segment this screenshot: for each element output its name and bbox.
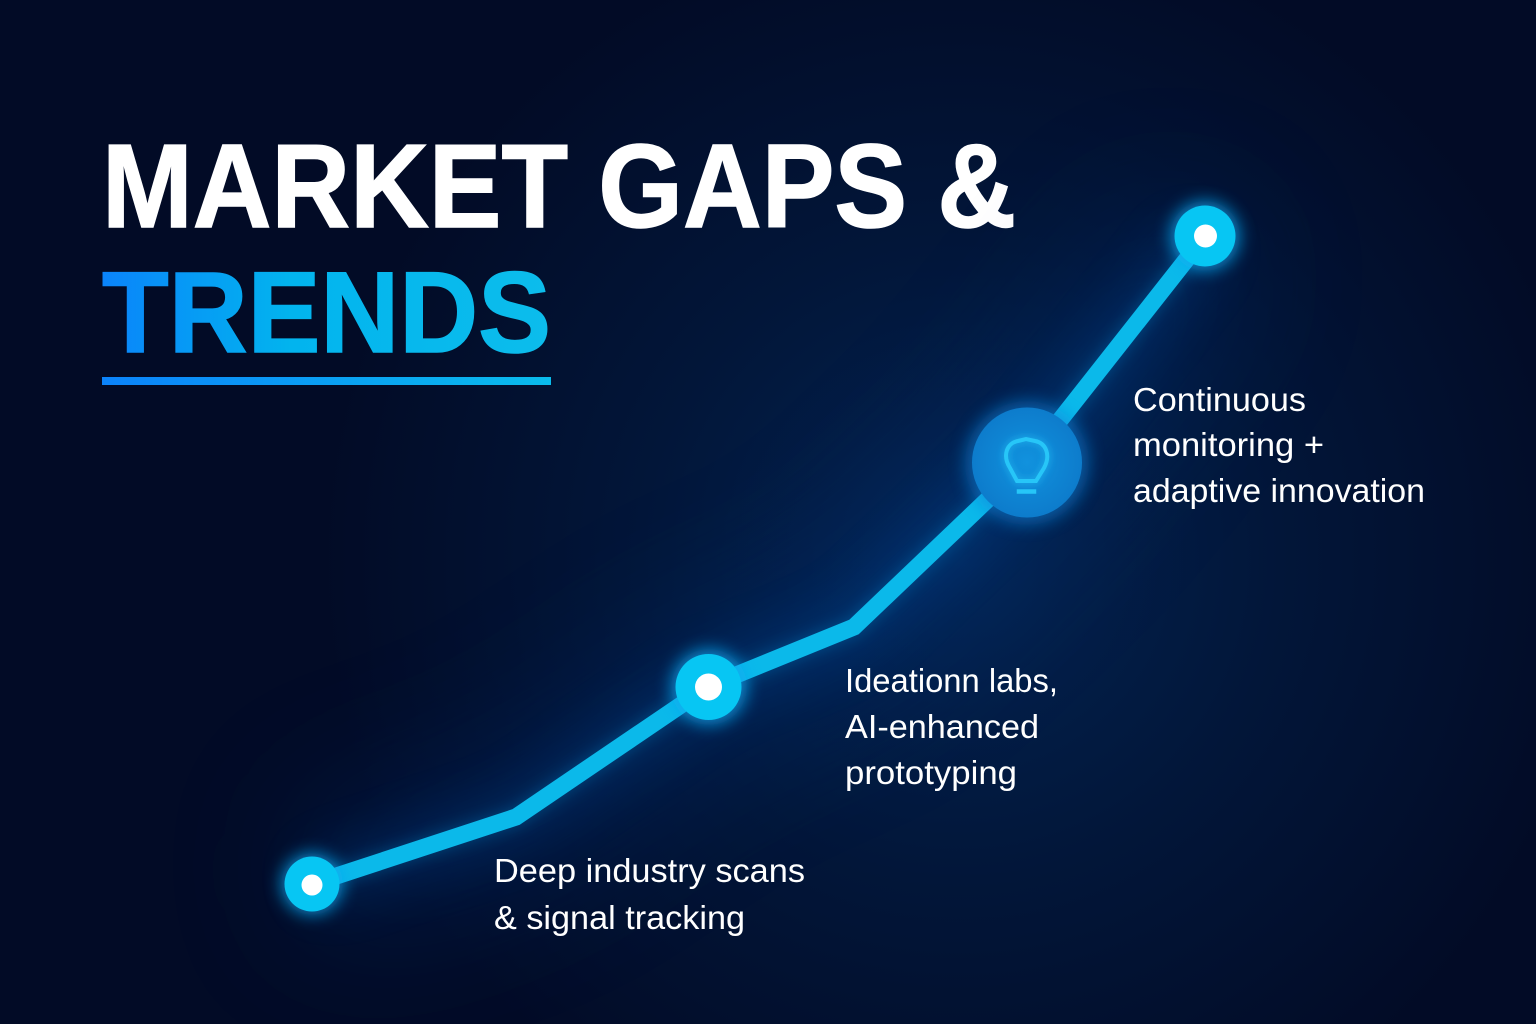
label: continuous monitoring: monitoring +	[1133, 426, 1324, 463]
label: continuous monitoring: adaptive innovation	[1133, 472, 1425, 509]
title line: market gaps: MARKET GAPS &	[102, 120, 1016, 253]
trend line	[312, 236, 1205, 884]
title	[102, 120, 1016, 385]
title underline	[102, 377, 551, 385]
label: ideation labs: prototyping	[845, 754, 1017, 791]
label: ideation labs: Ideationn labs,	[845, 662, 1058, 699]
label: ideation labs: AI-enhanced	[845, 708, 1039, 745]
label: deep industry scans: & signal tracking	[494, 899, 745, 936]
title line: trends: TRENDS	[102, 249, 551, 377]
icon: lightbulb	[1006, 439, 1047, 493]
node: top	[1170, 201, 1240, 271]
growth line chart	[281, 201, 1240, 915]
node: start	[281, 853, 343, 915]
label: continuous monitoring	[1133, 381, 1425, 509]
label: ideation labs	[845, 662, 1058, 791]
label: deep industry scans: Deep industry scans	[494, 852, 805, 889]
label: deep industry scans	[494, 852, 805, 936]
node: lightbulb hub	[965, 401, 1089, 525]
line glow	[312, 236, 1205, 884]
label: continuous monitoring: Continuous	[1133, 381, 1306, 418]
node: middle	[671, 649, 747, 725]
